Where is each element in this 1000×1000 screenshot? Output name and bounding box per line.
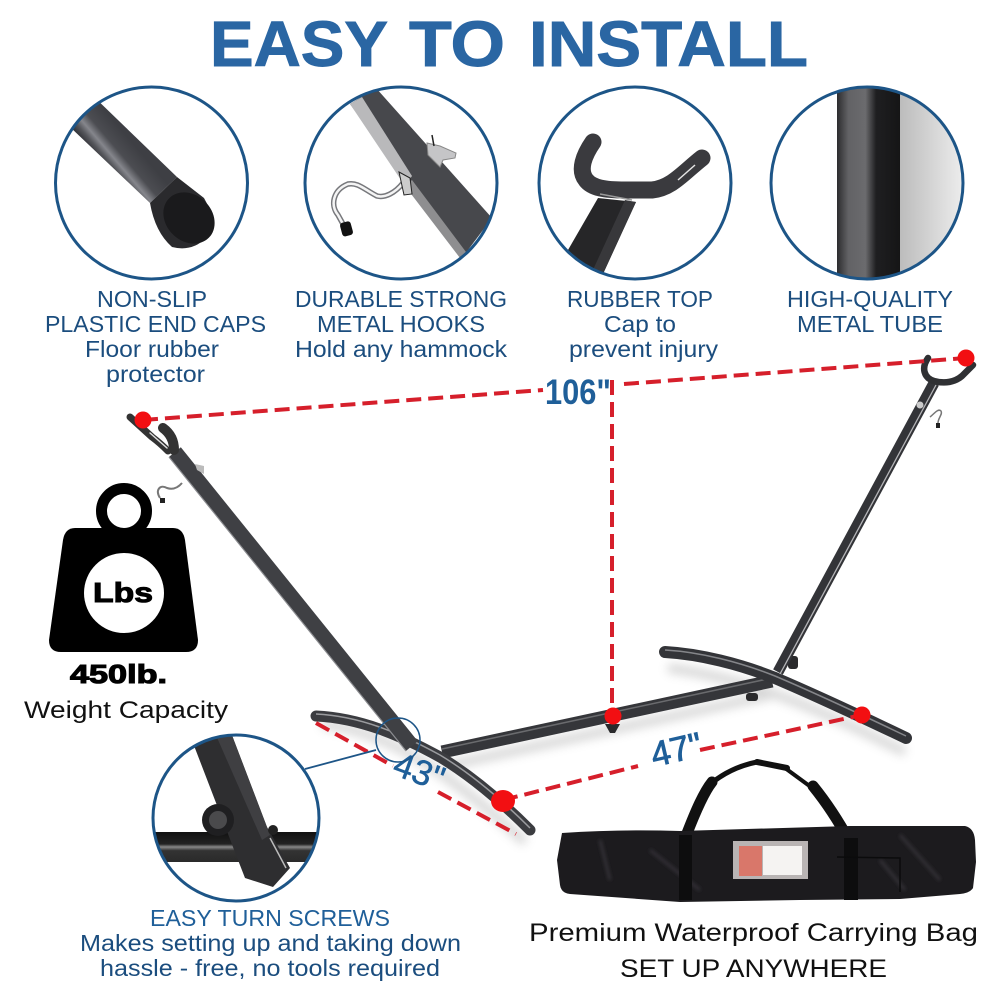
label 47: 47" <box>647 725 706 775</box>
right wing nut <box>916 402 924 408</box>
bag caption <box>529 919 978 983</box>
caption: RUBBER TOP <box>567 286 713 312</box>
caption: Hold any hammock <box>295 336 508 362</box>
bag caption: Premium Waterproof Carrying Bag <box>529 919 978 947</box>
dimension: 43 inch depth <box>316 723 516 834</box>
panel: end caps <box>46 86 265 387</box>
photo: vertical metal tube <box>837 85 965 285</box>
caption <box>567 286 719 362</box>
label 43: 43" <box>388 745 450 799</box>
hammock stand <box>130 358 973 842</box>
right leg <box>778 383 934 672</box>
bag straps <box>686 762 850 842</box>
caption: prevent injury <box>569 336 719 362</box>
photo: U-shaped fork top <box>568 142 702 285</box>
caption: Cap to <box>604 311 676 337</box>
weight capacity badge <box>24 488 228 724</box>
title: TO <box>409 8 505 80</box>
caption: METAL TUBE <box>797 311 943 337</box>
caption: METAL HOOKS <box>317 311 485 337</box>
wing nut <box>195 464 204 474</box>
bag caption: SET UP ANYWHERE <box>620 955 887 983</box>
panel: metal hooks <box>295 87 508 362</box>
label 106: 106" <box>545 373 611 412</box>
center bar <box>442 681 772 752</box>
right fork <box>924 358 973 382</box>
callout: easy turn screws <box>80 718 461 981</box>
left leg <box>175 452 412 746</box>
callout ring <box>376 718 420 762</box>
photo: tube with hook and wing nut <box>334 88 492 258</box>
dimension: 47 inch width <box>503 706 870 800</box>
panel: metal tube <box>771 85 965 337</box>
bag handle wraps <box>679 835 692 900</box>
left hook <box>158 483 182 498</box>
left fork <box>130 417 174 451</box>
panel: rubber top <box>539 87 731 362</box>
icon: weight <box>49 488 198 652</box>
dimension: 106 inch span <box>134 350 974 724</box>
caption: hassle - free, no tools required <box>100 955 440 981</box>
right base arc <box>665 652 906 738</box>
title: EASY <box>210 8 388 80</box>
caption: EASY TURN SCREWS <box>150 905 390 931</box>
title <box>210 8 808 80</box>
title: INSTALL <box>529 8 808 80</box>
photo: knob and tube joint <box>156 736 316 887</box>
caption <box>295 286 508 362</box>
bag body <box>557 826 976 902</box>
icon: weight: Lbs <box>93 577 153 608</box>
caption <box>787 286 953 337</box>
caption: NON-SLIP <box>97 286 207 312</box>
bag zip pocket line <box>837 857 900 892</box>
right hook <box>930 410 941 423</box>
capacity value: 450lb. <box>70 659 167 689</box>
caption <box>45 286 266 387</box>
caption: DURABLE STRONG <box>295 286 507 312</box>
callout connector <box>305 750 376 769</box>
feet <box>605 656 798 733</box>
bag label pocket <box>733 841 808 879</box>
floor shadows <box>322 668 905 842</box>
caption: PLASTIC END CAPS <box>45 311 266 337</box>
left base arc <box>316 716 530 830</box>
caption: protector <box>106 361 205 387</box>
caption: Floor rubber <box>85 336 219 362</box>
capacity label: Weight Capacity <box>24 697 228 724</box>
caption: Makes setting up and taking down <box>80 930 461 956</box>
caption <box>80 905 461 981</box>
photo: tube with end cap <box>73 103 215 248</box>
bag folds <box>600 835 940 890</box>
carrying bag <box>529 762 978 983</box>
caption: HIGH-QUALITY <box>787 286 953 312</box>
